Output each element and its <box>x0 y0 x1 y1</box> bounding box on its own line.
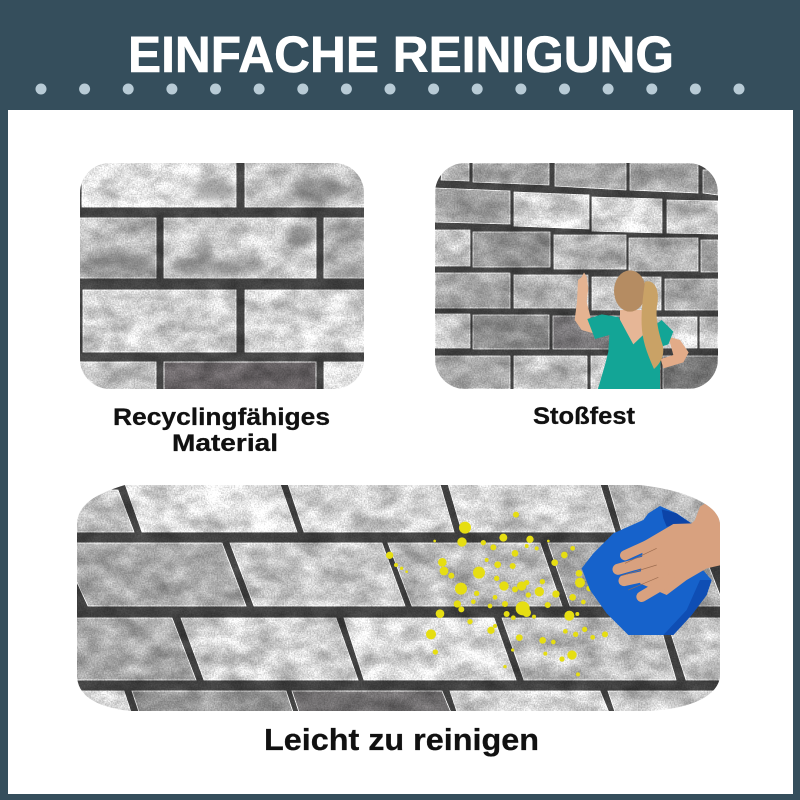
cloth shadow <box>663 580 712 635</box>
yellow paint splash <box>386 512 608 676</box>
hand on hip <box>643 368 660 383</box>
label: impact resistant: Stoßfest <box>533 403 635 430</box>
right arm <box>661 337 689 368</box>
panel: easy to clean wall photo <box>60 484 730 715</box>
blue cloth and hand <box>582 502 722 635</box>
label: recycled material: Recyclingfähiges <box>113 404 330 431</box>
title: EINFACHE REINIGUNG <box>128 26 674 83</box>
bare back <box>620 310 643 344</box>
child in green dress <box>575 270 689 390</box>
panel: recycled material brick photo <box>78 160 367 392</box>
ponytail <box>642 281 663 369</box>
blue cloth <box>582 506 712 635</box>
panel: impact resistant wall with child <box>435 163 718 390</box>
label: easy to clean: Leicht zu reinigen <box>264 722 539 757</box>
wiping hand <box>618 502 722 597</box>
slanted brick wall <box>60 484 730 715</box>
label: material: Material <box>172 430 278 457</box>
brick weathering patches <box>85 177 365 276</box>
brick wall <box>435 163 718 389</box>
head hair <box>614 270 646 312</box>
dress <box>587 314 673 390</box>
cloth fold <box>662 509 691 527</box>
raised arm <box>575 272 593 333</box>
dotted divider <box>36 84 744 94</box>
